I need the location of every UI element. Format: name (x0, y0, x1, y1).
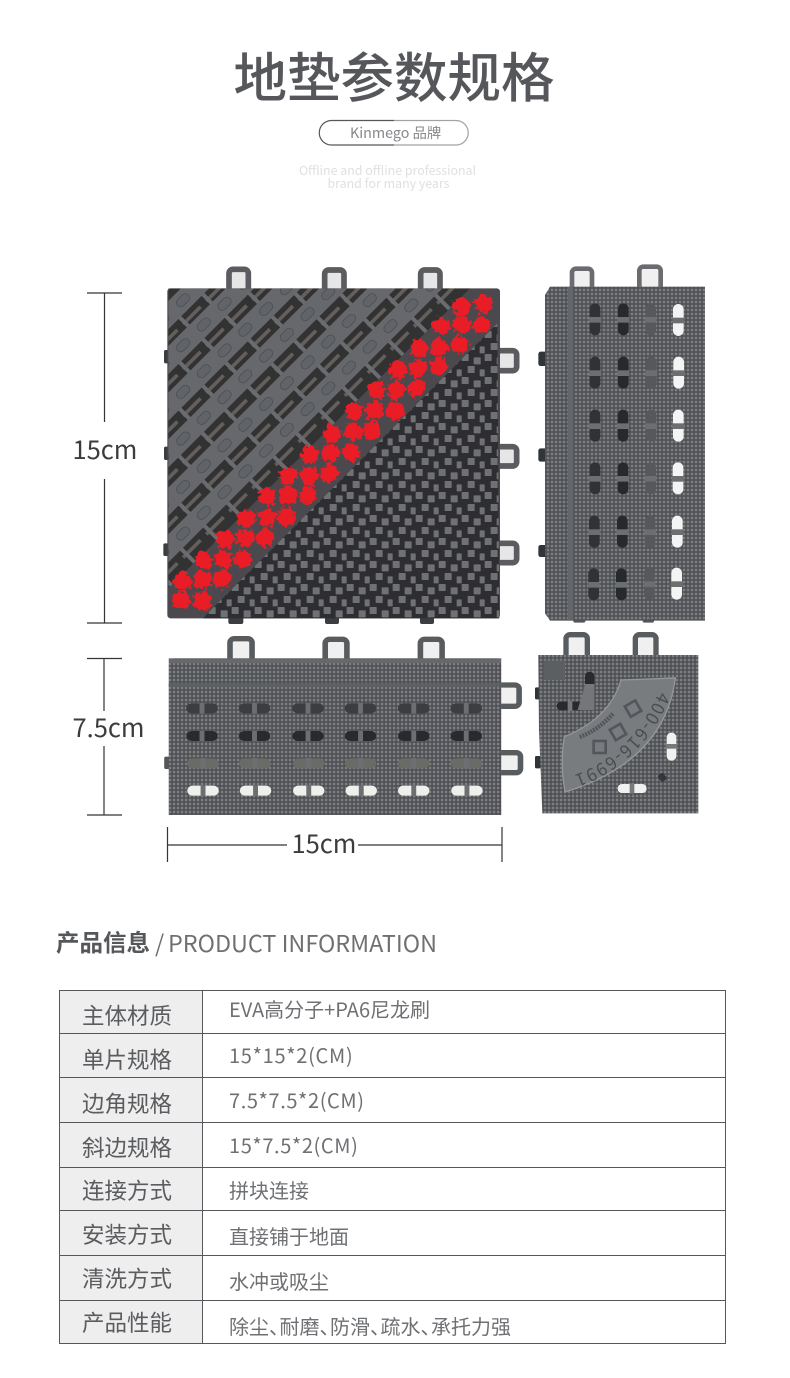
row: connection: 拼块连接 (229, 1175, 309, 1204)
row: material (82, 994, 430, 1031)
row: edge size: 15*7.5*2(CM) (229, 1130, 358, 1159)
product photo: main square tile (160, 260, 517, 624)
dimension: 7.5cm height (72, 658, 145, 815)
row: installation: 安装方式 (82, 1218, 172, 1250)
row: performance: 除尘、耐磨、防滑、疏水、承托力强 (229, 1311, 511, 1340)
row: material: EVA高分子+PA6尼龙刷 (229, 994, 430, 1023)
upper-left bars (168, 288, 470, 588)
row: cleaning: 水冲或吸尘 (229, 1266, 329, 1295)
row: performance (82, 1306, 511, 1340)
row: cleaning (82, 1262, 329, 1295)
section heading (56, 924, 437, 959)
product photo: half tile, horizontal (164, 639, 520, 815)
row: connection: 连接方式 (82, 1174, 172, 1206)
row: cleaning: 清洗方式 (82, 1262, 172, 1294)
arc plate (562, 678, 675, 792)
dimension: 15cm width: 15cm (292, 824, 356, 861)
tagline: brand for many years (328, 174, 450, 192)
product photo: corner tile (535, 632, 698, 814)
red brush strip (172, 295, 492, 610)
title: 地垫参数规格 (234, 36, 554, 113)
brand pill: Kinmego 品牌 (350, 122, 441, 143)
dimension: 15cm width (168, 824, 502, 862)
row: tile size (82, 1040, 353, 1075)
row: installation (82, 1218, 349, 1250)
row: connection (82, 1174, 309, 1206)
brand pill (319, 120, 468, 145)
section heading: 产品信息 (56, 924, 150, 958)
stamped marks on plate (580, 700, 641, 753)
section heading: / (155, 925, 164, 959)
tagline: Offline and offline professional (299, 161, 476, 179)
row: performance: 产品性能 (82, 1306, 172, 1338)
printed phone number: 400-616-6991 (575, 693, 668, 786)
row: edge size (82, 1130, 358, 1163)
row: tile size: 单片规格 (82, 1043, 172, 1075)
tagline (299, 161, 476, 192)
spec table (60, 990, 726, 1344)
row: tile size: 15*15*2(CM) (229, 1040, 353, 1069)
row: corner size (82, 1085, 365, 1119)
dimension: 15cm height (72, 293, 137, 623)
row: corner size: 7.5*7.5*2(CM) (229, 1085, 365, 1114)
row: edge size: 斜边规格 (82, 1131, 172, 1163)
row: material: 主体材质 (82, 999, 172, 1031)
section heading: PRODUCT INFORMATION (168, 925, 437, 959)
dimension: 15cm height: 15cm (72, 430, 137, 467)
row: installation: 直接铺于地面 (229, 1221, 349, 1250)
row: corner size: 边角规格 (82, 1087, 172, 1119)
dimension: 7.5cm height: 7.5cm (72, 708, 145, 745)
product photo: half tile, vertical (538, 267, 705, 623)
lower-right studded surface (203, 323, 499, 618)
